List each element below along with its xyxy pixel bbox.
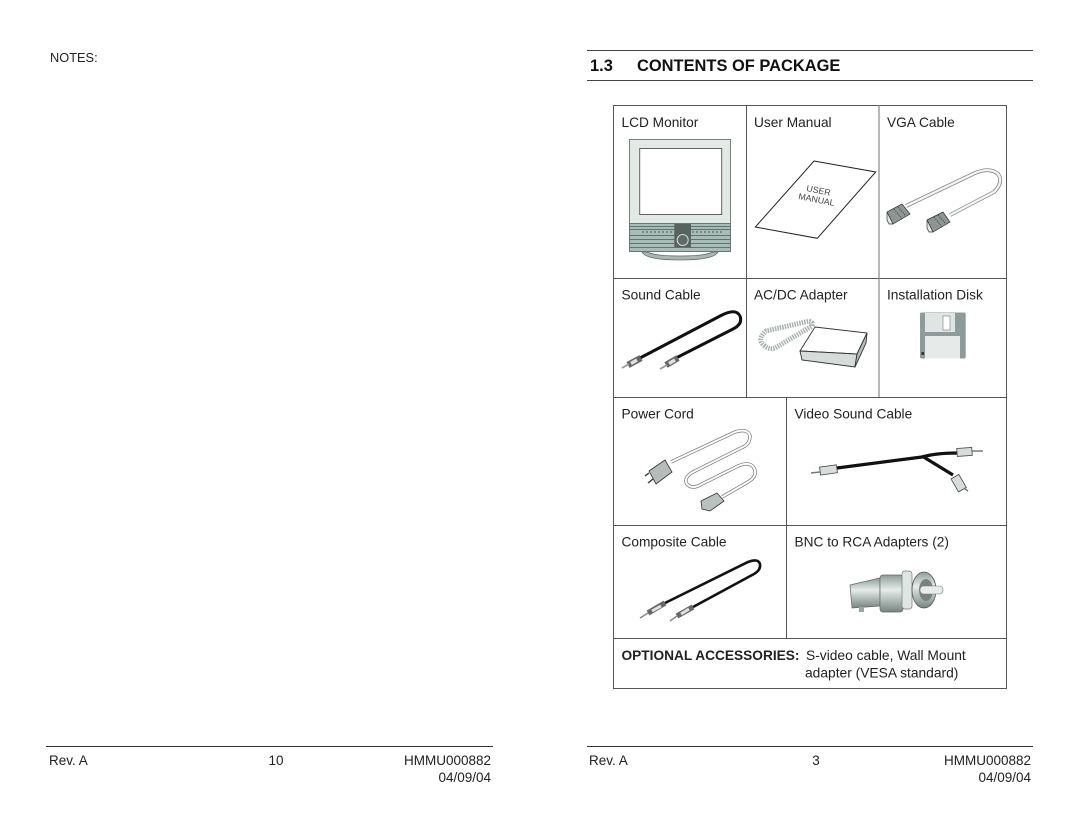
right page footer: Rev. A (589, 753, 628, 768)
icon: user manual booklet: USER (806, 183, 832, 198)
icon: sound cable (622, 312, 741, 369)
icon: user manual booklet: MANUAL (798, 191, 836, 208)
left page footer: Rev. A (49, 753, 88, 768)
item label: Installation Disk: Installation Disk (887, 288, 983, 302)
notes label: NOTES: (50, 50, 98, 65)
optional accessories note: S-video cable, Wall Mount (806, 648, 966, 663)
section heading (587, 50, 1033, 80)
icon: video sound cable (811, 447, 983, 492)
icon: user manual booklet (755, 161, 876, 238)
item label: Sound Cable: Sound Cable (622, 288, 701, 302)
item label: Video Sound Cable: Video Sound Cable (794, 406, 912, 422)
icon: power cord (645, 431, 755, 511)
left page footer: 04/09/04 (438, 770, 491, 785)
icon: BNC to RCA adapter (850, 571, 943, 612)
section heading: 1.3 (590, 57, 613, 75)
icon: VGA cable (887, 170, 1000, 232)
optional accessories note (622, 648, 966, 680)
right page footer: 3 (812, 753, 820, 768)
icon: floppy disk (920, 312, 966, 358)
right page footer (587, 746, 1033, 785)
package contents table grid (613, 105, 1006, 688)
left page footer (46, 746, 493, 785)
item label: VGA Cable: VGA Cable (887, 115, 955, 130)
item label: User Manual: User Manual (754, 115, 832, 130)
optional accessories note: OPTIONAL ACCESSORIES: (622, 648, 799, 663)
optional accessories note: adapter (VESA standard) (805, 666, 958, 680)
item label: Power Cord: Power Cord (622, 406, 694, 422)
section heading: CONTENTS OF PACKAGE (637, 57, 840, 75)
icon: composite cable (640, 560, 760, 621)
left page footer: HMMU000882 (404, 753, 491, 768)
right page footer: 04/09/04 (978, 770, 1031, 785)
item label: BNC to RCA Adapters: BNC to RCA Adapters (2) (794, 534, 949, 550)
item label: AC/DC Adapter: AC/DC Adapter (754, 288, 848, 302)
icon: LCD monitor (630, 140, 730, 260)
item label: LCD Monitor: LCD Monitor (622, 115, 699, 130)
item label: Composite Cable: Composite Cable (622, 534, 726, 550)
right page footer: HMMU000882 (944, 753, 1031, 768)
left page footer: 10 (268, 753, 284, 768)
icon: AC/DC adapter (761, 322, 867, 367)
